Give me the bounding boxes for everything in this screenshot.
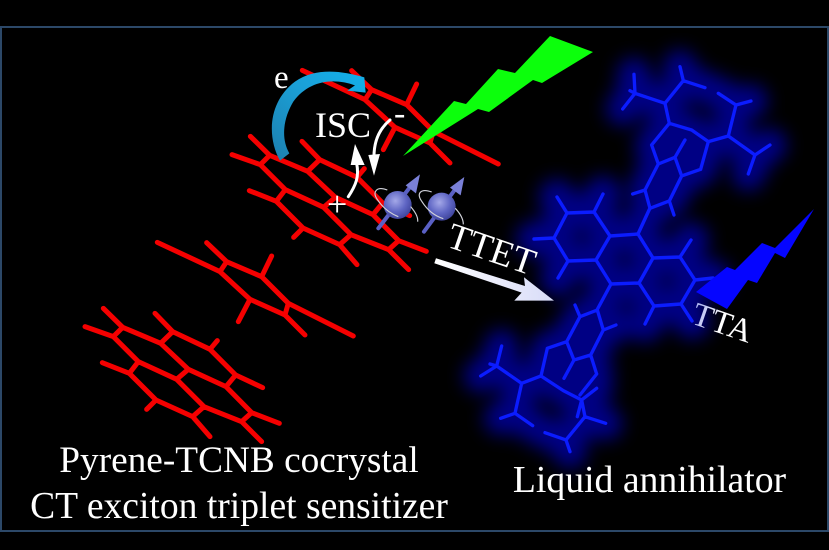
label: plus sign: + <box>327 184 347 224</box>
icon: spin right <box>419 177 464 232</box>
arrow: TTET <box>434 258 554 301</box>
label: e: e <box>274 60 289 96</box>
pyrene molecule upper <box>232 136 426 270</box>
arrow: ISC up <box>348 144 365 197</box>
annihilator glow <box>481 67 770 452</box>
caption: annihilator: Liquid annihilator <box>513 459 787 501</box>
lower substituent <box>481 305 616 452</box>
label: TTA: TTA <box>687 297 757 351</box>
label: TTET: TTET <box>442 216 541 284</box>
TCNB molecule top <box>302 70 498 164</box>
icon: spin left <box>375 174 420 228</box>
pyrene molecule lower <box>85 308 279 442</box>
TCNB molecule middle <box>157 242 353 336</box>
upper substituent <box>623 67 770 215</box>
label: ISC: ISC <box>315 105 371 145</box>
arrow: minus down <box>368 120 390 176</box>
caption: sensitizer: CT exciton triplet sensitizer <box>30 486 448 527</box>
central fused rings <box>534 194 713 324</box>
caption: cocrystal: Pyrene-TCNB cocrystal <box>59 440 419 481</box>
icon: green lightning bolt <box>403 36 593 156</box>
label: minus sign: - <box>394 95 405 132</box>
arrow: electron transfer <box>272 72 366 161</box>
annihilator molecule <box>481 67 770 452</box>
icon: blue lightning bolt <box>696 209 814 309</box>
